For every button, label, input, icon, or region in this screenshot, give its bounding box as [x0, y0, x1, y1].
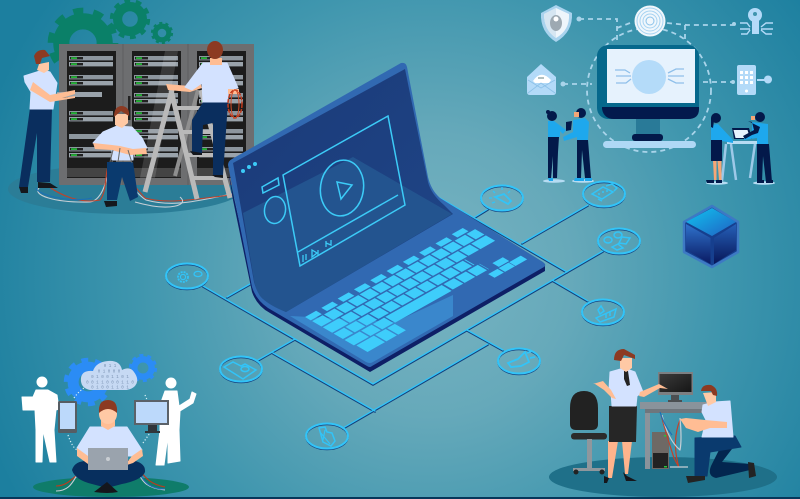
server rack: [59, 44, 254, 185]
icon: chat node: [583, 182, 625, 208]
icon: data cloud: 0 1 1: [104, 365, 117, 369]
icon: idea bulb node: [481, 186, 523, 212]
laptop shadow edge: [228, 170, 545, 372]
ground ellipse: [8, 164, 242, 214]
cables: [661, 415, 680, 466]
icon: mixed devices node: [598, 228, 640, 254]
people: colleagues at laptop desk: [706, 112, 775, 185]
icon: data cloud: [81, 361, 137, 390]
person: seated with laptop: [72, 400, 145, 493]
window dots: [241, 162, 257, 173]
icon: fingerprint circle: [634, 6, 666, 36]
floor cables: [36, 162, 232, 207]
ground ellipse: [33, 477, 189, 497]
scene: server room team: [8, 1, 254, 214]
person: technician on ladder: [166, 41, 242, 178]
icon: data cloud: 0 1 0 0 1 1 0 1: [91, 376, 129, 380]
pc tower: [652, 432, 669, 469]
person: woman in skirt: [593, 349, 668, 483]
icon: gears node: [166, 264, 208, 290]
scene: cyber security monitor: [527, 5, 775, 185]
icon: data cloud: 0 1 0 0 1 1 0 1: [91, 386, 129, 390]
icon: megaphone node: [498, 348, 540, 374]
icon: shield: [541, 5, 572, 42]
scene: office technician repair: [549, 349, 777, 497]
laptop screen: [233, 69, 453, 312]
icon: cube: [684, 206, 738, 267]
icon: camera node: [220, 356, 262, 382]
icon: chart node: [582, 300, 624, 326]
floor cables: [56, 468, 165, 491]
person: white silhouette left: [22, 376, 59, 462]
laptop body: [228, 63, 545, 367]
network connector lines: [203, 198, 603, 429]
icon: data cloud: 0 1 0 0 0: [98, 370, 121, 374]
people: two colleagues with tablet: [543, 108, 594, 183]
ground ellipse: [549, 457, 777, 497]
icon: key circuit: [740, 8, 773, 34]
office chair: [570, 391, 607, 474]
laptop: [228, 63, 545, 372]
icon: green gears: [52, 1, 172, 75]
person: technician holding server: [19, 50, 102, 193]
screen lighter triangle: [243, 157, 452, 312]
icon: data cloud: 0 0 1 1 0 0 0 1 1 0: [86, 382, 134, 386]
laptop base lighter panel: [290, 295, 453, 363]
keyboard: [308, 227, 524, 350]
icon: tablet: [58, 401, 77, 433]
desk: [640, 402, 712, 469]
icon: blocks node: [306, 424, 348, 450]
dashed connectors: [563, 19, 733, 152]
icon: blue gears: [66, 355, 156, 404]
dotted arcs: [68, 388, 152, 450]
scene: cloud data team: [22, 355, 196, 497]
icon: envelope: [527, 64, 556, 95]
video player window: [262, 116, 405, 266]
icon: phone: [737, 65, 772, 95]
person: seated technician: [93, 106, 147, 207]
person: kneeling technician: [680, 385, 756, 483]
desktop monitor: [658, 372, 693, 402]
ladder: [145, 90, 230, 199]
icon: desktop monitor: [134, 400, 169, 433]
monitor: [597, 45, 699, 148]
bottom strip: [0, 497, 800, 499]
person: white silhouette right: [156, 378, 196, 465]
